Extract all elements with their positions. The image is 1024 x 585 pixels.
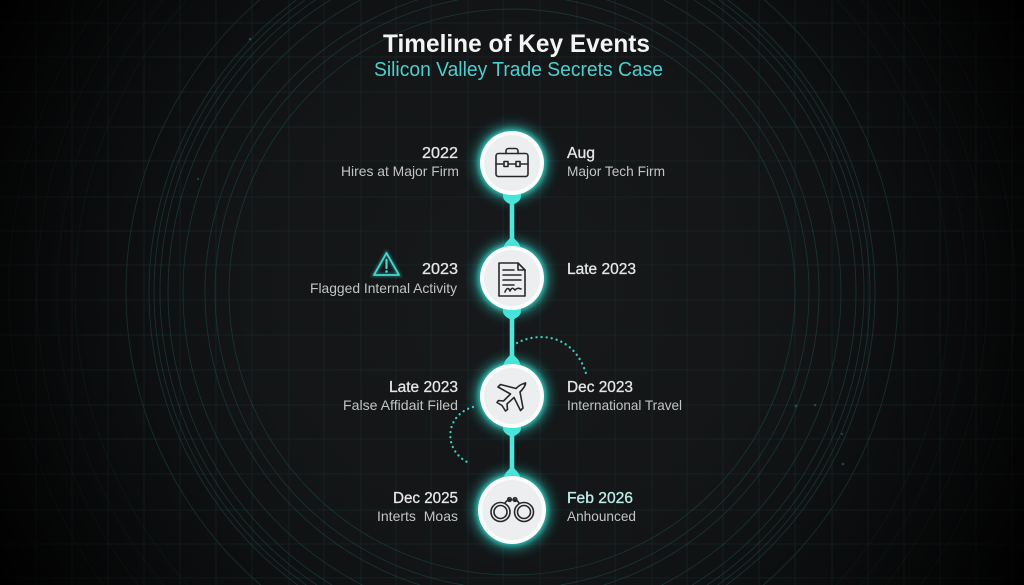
- event 3 right: Dec 2023: Dec 2023: [567, 379, 633, 396]
- event 4 left: Dec 2025: Interts Moas: [377, 508, 458, 524]
- timeline connector: [503, 190, 521, 485]
- event 4 right: Feb 2026: Feb 2026: [567, 490, 633, 507]
- subtitle: Silicon Valley Trade Secrets Case: [374, 59, 663, 81]
- event 2 left: 2023: 2023: [422, 261, 458, 278]
- event 3 left: Late 2023: [343, 379, 458, 413]
- event 3 left: Late 2023: False Affidait Filed: [343, 397, 458, 413]
- event 3 left: Late 2023: Late 2023: [389, 379, 458, 396]
- node 2: document: [475, 241, 549, 315]
- title: Timeline of Key Events: [383, 30, 650, 58]
- event 3 right: Dec 2023: International Travel: [567, 397, 682, 413]
- event 1 left: 2022: [341, 145, 459, 179]
- icon: handcuffs: [491, 498, 534, 522]
- event 2 left: 2023: Flagged Internal Activity: [310, 280, 457, 296]
- icon: briefcase: [496, 148, 528, 176]
- node 4: handcuffs: [473, 471, 551, 549]
- icon: document: [499, 263, 525, 296]
- node 1: briefcase: [475, 126, 549, 200]
- event 4 right: Feb 2026: Anhounced: [567, 508, 636, 524]
- icon: airplane: [497, 383, 526, 411]
- node 3: airplane: [475, 359, 549, 433]
- event 1 left: 2022: Hires at Major Firm: [341, 163, 459, 179]
- event 2 right: Late 2023: Late 2023: [567, 261, 636, 278]
- dotted arc left: [450, 407, 473, 463]
- icon: warning triangle: [374, 253, 399, 275]
- event 1 left: 2022: 2022: [422, 145, 458, 162]
- event 4 right: Feb 2026: [567, 490, 636, 524]
- event 3 right: Dec 2023: [567, 379, 682, 413]
- event 2 left: 2023: [310, 261, 458, 296]
- event 4 left: Dec 2025: [377, 490, 458, 524]
- event 1 right: Aug: Major Tech Firm: [567, 163, 665, 179]
- dotted arc right: [517, 337, 586, 375]
- event 1 right: Aug: Aug: [567, 145, 595, 162]
- event 1 right: Aug: [567, 145, 665, 179]
- event 4 left: Dec 2025: Dec 2025: [393, 490, 458, 507]
